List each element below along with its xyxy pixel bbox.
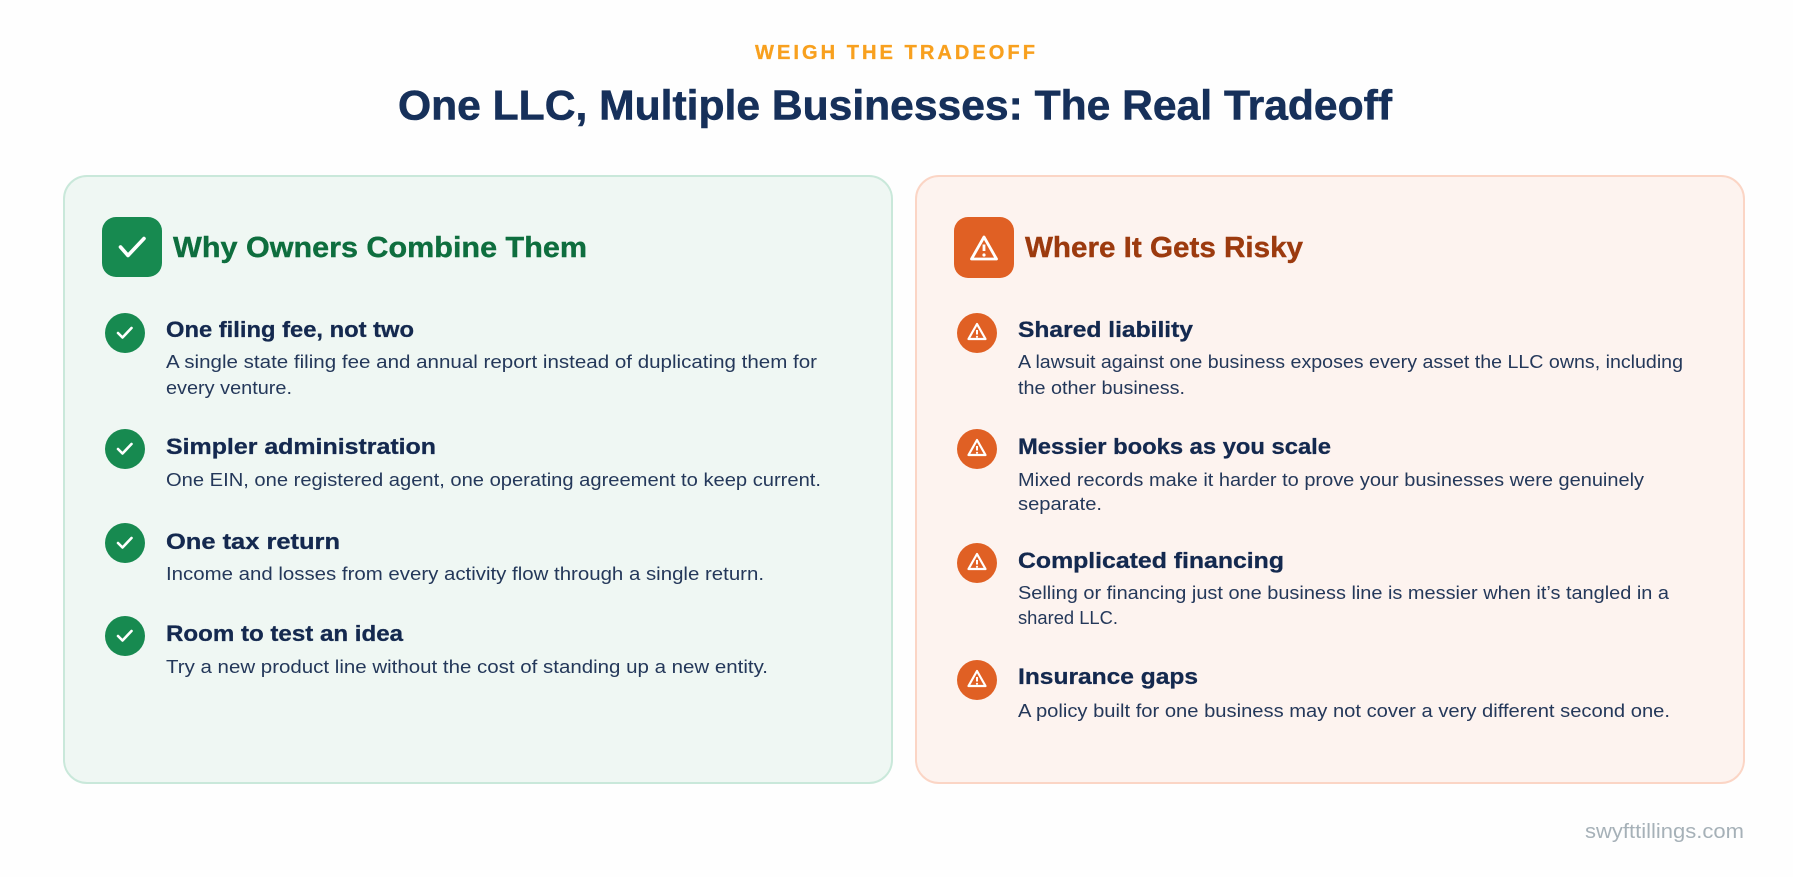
item: room to test an idea: Room to test an idea bbox=[166, 621, 404, 646]
item: simpler administration bbox=[105, 429, 821, 490]
item: one tax return bbox=[105, 523, 764, 584]
item: messier books: separate. bbox=[1018, 493, 1102, 514]
item: insurance gaps bbox=[957, 660, 1670, 721]
item: messier books bbox=[957, 429, 1645, 514]
item: one filing fee: One filing fee, not two bbox=[166, 317, 414, 342]
watermark: swyfttillings.com bbox=[1585, 821, 1744, 843]
item: simpler administration: One EIN, one registered agent, one operating agreement to keep current. bbox=[166, 469, 821, 490]
item: room to test an idea: Try a new product line without the cost of standing up a new entity. bbox=[166, 656, 768, 677]
item: simpler administration: Simpler administration bbox=[166, 434, 436, 459]
item: complicated financing: Complicated financing bbox=[1018, 548, 1284, 573]
item: complicated financing bbox=[957, 543, 1670, 628]
item: complicated financing: shared LLC. bbox=[1018, 607, 1118, 628]
icon: header warning bbox=[954, 217, 1014, 278]
icon: header check bbox=[102, 217, 162, 277]
item: insurance gaps: Insurance gaps bbox=[1018, 664, 1198, 689]
item: shared liability: the other business. bbox=[1018, 377, 1185, 398]
item: one tax return: Income and losses from every activity flow through a single return. bbox=[166, 563, 764, 584]
eyebrow: WEIGH THE TRADEOFF bbox=[755, 42, 1038, 64]
item: complicated financing: Selling or financing just one business line is messier when it’s tangled in a bbox=[1018, 582, 1670, 603]
item: one filing fee: every venture. bbox=[166, 377, 292, 398]
item: shared liability: Shared liability bbox=[1018, 317, 1194, 342]
item: insurance gaps: A policy built for one business may not cover a very different second one. bbox=[1018, 700, 1670, 721]
item: shared liability bbox=[957, 313, 1683, 398]
item: one filing fee: A single state filing fee and annual report instead of duplicating them for bbox=[166, 351, 817, 372]
title: One LLC, Multiple Businesses: The Real Tradeoff bbox=[398, 82, 1393, 128]
item: one tax return: One tax return bbox=[166, 529, 340, 554]
item: shared liability: A lawsuit against one business exposes every asset the LLC owns, including bbox=[1018, 351, 1683, 372]
item: room to test an idea bbox=[105, 616, 768, 677]
panel: why owners combine them bbox=[64, 176, 892, 783]
panel: where it gets risky bbox=[916, 176, 1744, 783]
panel heading: Why Owners Combine Them bbox=[173, 232, 587, 264]
panel heading: Where It Gets Risky bbox=[1025, 232, 1303, 264]
item: messier books: Mixed records make it harder to prove your businesses were genuinely bbox=[1018, 469, 1645, 490]
item: messier books: Messier books as you scale bbox=[1018, 434, 1331, 459]
item: one filing fee bbox=[105, 313, 817, 398]
